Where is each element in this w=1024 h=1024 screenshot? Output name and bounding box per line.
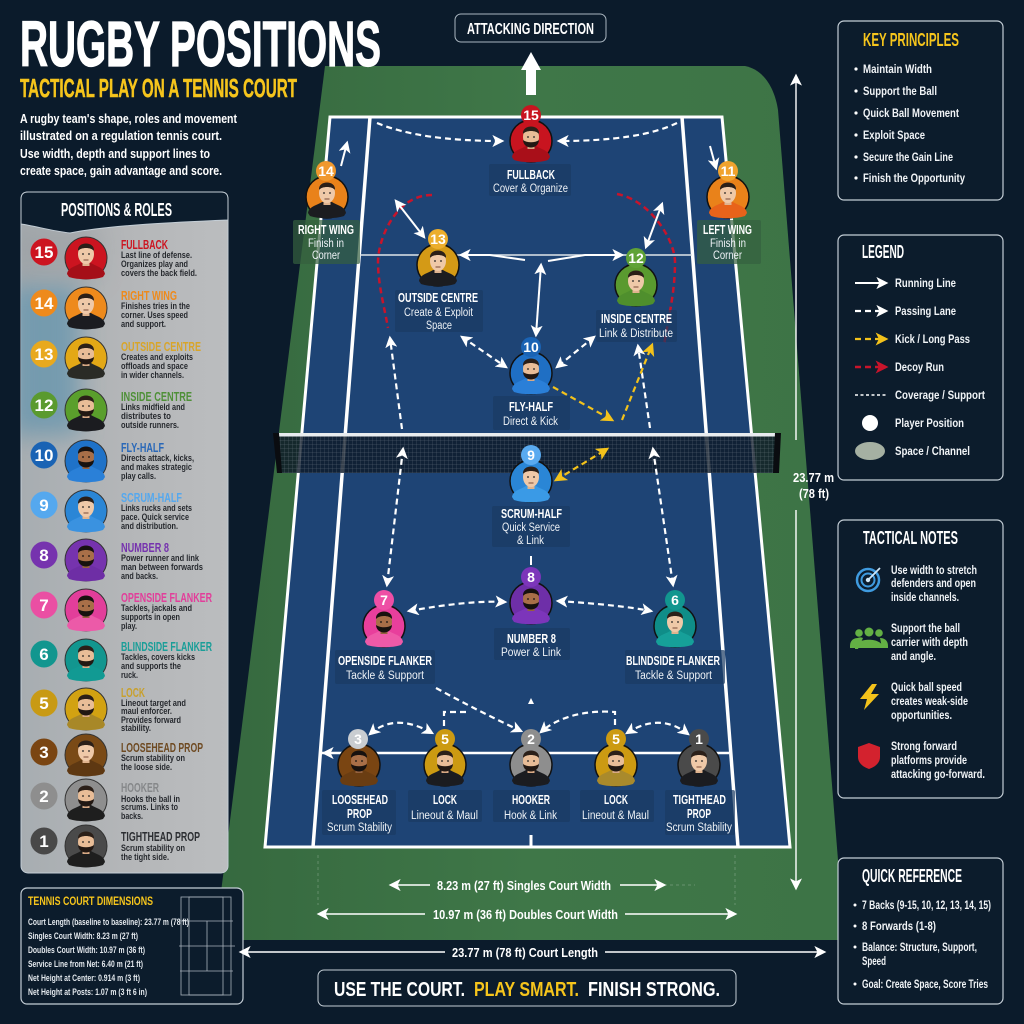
player: loosehead prop	[322, 729, 396, 835]
panel: tennis court dimensions: Court Length (baseline to baseline): 23.77 m (78 ft)	[28, 917, 189, 928]
panel: tactical notes: Strong forward	[891, 741, 957, 753]
player: inside centre: Link & Distribute	[599, 328, 673, 340]
player: left wing: Finish in	[710, 238, 746, 250]
dimension: doubles court width: 10.97 m (36 ft) Doubles Court Width	[433, 907, 618, 922]
row: loosehead prop: 3	[39, 743, 49, 762]
player: blindside flanker: BLINDSIDE FLANKER	[626, 654, 720, 668]
row: outside centre: Creates and exploits	[121, 352, 193, 363]
row: openside flanker	[30, 589, 212, 632]
panel: key principles	[838, 21, 1003, 200]
player: hooker: 2	[527, 731, 535, 747]
row: hooker: scrums. Links to	[121, 802, 178, 813]
panel: key principles: Maintain Width	[863, 64, 932, 76]
bottom banner	[318, 970, 736, 1006]
row: inside centre: distributes to	[121, 411, 171, 422]
row: fly-half: 10	[35, 446, 53, 465]
player: blindside flanker	[625, 590, 725, 684]
intro text: A rugby team's shape, roles and movement	[20, 111, 238, 126]
row: scrum-half: pace. Quick service	[121, 512, 189, 523]
panel: key principles: Exploit Space	[863, 130, 925, 142]
row: outside centre: OUTSIDE CENTRE	[121, 340, 201, 354]
panel: tactical notes: Quick ball speed	[891, 682, 962, 694]
player: lock left: 5	[441, 731, 449, 747]
legend: player position: Player Position	[895, 418, 964, 430]
legend: player position	[862, 415, 964, 431]
panel: key principles: Support the Ball	[863, 86, 937, 98]
player: hooker: HOOKER	[512, 793, 550, 807]
player: tighthead prop: PROP	[687, 807, 711, 821]
subtitle: TACTICAL PLAY ON A TENNIS COURT	[20, 73, 297, 103]
player: scrum-half: 9	[527, 447, 535, 463]
player: outside centre: Space	[426, 320, 452, 332]
intro text	[20, 111, 238, 178]
attacking direction label: ATTACKING DIRECTION	[467, 21, 594, 38]
legend: decoy run	[855, 362, 944, 374]
player: tighthead prop: Scrum Stability	[666, 822, 732, 834]
row: outside centre	[30, 337, 201, 381]
intro text: create space, gain advantage and score.	[20, 163, 222, 178]
row: loosehead prop	[30, 734, 203, 776]
arrow: attacking direction	[521, 52, 541, 95]
icon: lightning bolt	[860, 684, 879, 710]
player: tighthead prop: TIGHTHEAD	[673, 793, 726, 807]
bottom banner: USE THE COURT.	[334, 979, 465, 1001]
row: right wing	[30, 287, 190, 330]
row: blindside flanker: Tackles, covers kicks	[121, 652, 195, 663]
row: scrum-half: 9	[39, 496, 49, 515]
row: outside centre: in wider channels.	[121, 370, 184, 381]
player: inside centre: 12	[628, 250, 644, 266]
panel: quick reference: 8 Forwards (1-8)	[862, 921, 936, 933]
row: hooker	[30, 779, 180, 822]
player: loosehead prop: PROP	[347, 807, 372, 821]
row: number 8: NUMBER 8	[121, 541, 169, 555]
row: right wing: and support.	[121, 319, 166, 330]
legend: kick: Kick / Long Pass	[895, 334, 970, 346]
player: openside flanker	[335, 590, 435, 684]
player: openside flanker: 7	[380, 592, 388, 608]
panel: key principles: Secure the Gain Line	[863, 152, 953, 164]
row: right wing: Finishes tries in the	[121, 301, 190, 312]
player: outside centre	[395, 229, 483, 332]
net	[273, 433, 781, 473]
row: outside centre: 13	[35, 345, 53, 364]
player: scrum-half: Quick Service	[502, 522, 560, 534]
player: loosehead prop: 3	[354, 731, 362, 747]
legend: running line: Running Line	[895, 278, 956, 290]
panel: legend: LEGEND	[862, 242, 904, 262]
panel: tactical notes: Use width to stretch	[891, 565, 977, 577]
player: number 8: Power & Link	[501, 647, 561, 659]
row: hooker: HOOKER	[121, 781, 159, 795]
row: lock: 5	[39, 694, 49, 713]
row: fly-half	[30, 440, 194, 482]
player: fullback	[489, 105, 571, 196]
player: inside centre	[596, 248, 677, 342]
player: scrum-half: & Link	[517, 535, 544, 547]
player: fly-half: FLY-HALF	[509, 400, 553, 414]
legend: decoy run: Decoy Run	[895, 362, 944, 374]
panel: tactical notes: carrier with depth	[891, 637, 968, 649]
row: fly-half: Directs attack, kicks,	[121, 453, 194, 464]
player: fly-half: Direct & Kick	[503, 416, 558, 428]
player: lock right: LOCK	[604, 793, 628, 807]
movement lines	[324, 123, 716, 753]
player: right wing: RIGHT WING	[298, 223, 354, 237]
panel: tactical notes: platforms provide	[891, 755, 967, 767]
panel: tactical notes: opportunities.	[891, 710, 952, 722]
green court surround	[215, 66, 838, 940]
dimension: court length vertical	[793, 76, 834, 888]
row: openside flanker: OPENSIDE FLANKER	[121, 591, 212, 605]
legend: coverage	[855, 390, 985, 402]
row: fullback: Last line of defense.	[121, 250, 192, 261]
row: inside centre: INSIDE CENTRE	[121, 390, 192, 404]
panel: tactical notes: attacking go-forward.	[891, 769, 985, 781]
row: number 8: 8	[39, 546, 49, 565]
row: right wing: 14	[35, 294, 54, 313]
panel: positions and roles	[10, 192, 228, 873]
panel: tactical notes: TACTICAL NOTES	[863, 528, 958, 548]
panel: quick reference: Speed	[862, 956, 886, 968]
panel: tennis court dimensions: TENNIS COURT DIMENSIONS	[28, 894, 153, 908]
intro text: Use width, depth and support lines to	[20, 146, 210, 161]
bottom banner: FINISH STRONG.	[588, 979, 720, 1001]
row: fullback: Organizes play and	[121, 259, 188, 270]
panel: tennis court dimensions: Singles Court Width: 8.23 m (27 ft)	[28, 931, 138, 942]
row: fullback	[30, 237, 197, 279]
icon: target	[857, 568, 880, 591]
intro text: illustrated on a regulation tennis court.	[20, 128, 222, 143]
row: scrum-half	[30, 490, 192, 532]
panel: tactical notes: inside channels.	[891, 592, 959, 604]
icon: shield	[858, 743, 880, 769]
player: blindside flanker: 6	[671, 592, 679, 608]
player: hooker: Hook & Link	[504, 810, 557, 822]
row: outside centre: offloads and space	[121, 361, 188, 372]
row: blindside flanker	[30, 639, 212, 681]
player: hooker	[493, 729, 570, 822]
player: lock left: LOCK	[433, 793, 457, 807]
row: lock: maul enforcer.	[121, 706, 172, 717]
mini court diagram	[179, 897, 235, 995]
row: hooker: Hooks the ball in	[121, 794, 180, 805]
row: inside centre: outside runners.	[121, 420, 179, 431]
panel: tennis court dimensions: Service Line from Net: 6.40 m (21 ft)	[28, 959, 143, 970]
player: scrum-half: SCRUM-HALF	[501, 507, 562, 521]
player: left wing	[697, 161, 761, 264]
panel: tennis court dimensions: Net Height at Posts: 1.07 m (3 ft 6 in)	[28, 987, 147, 998]
player: fullback: 15	[523, 107, 539, 123]
panel: tactical notes: creates weak-side	[891, 696, 968, 708]
row: hooker: 2	[39, 787, 49, 806]
player: loosehead prop: Scrum Stability	[327, 822, 392, 834]
row: lock: Lineout target and	[121, 698, 186, 709]
player: left wing: 11	[721, 163, 736, 179]
row: blindside flanker: and supports the	[121, 661, 181, 672]
row: lock	[30, 686, 186, 734]
player: lock left	[408, 729, 482, 822]
panel: tennis court dimensions: Net Height at Center: 0.914 m (3 ft)	[28, 973, 140, 984]
legend: passing lane	[855, 306, 956, 318]
panel heading: POSITIONS & ROLES	[61, 200, 172, 220]
player: inside centre: INSIDE CENTRE	[601, 312, 672, 326]
row: inside centre: Links midfield and	[121, 402, 185, 413]
row: lock: stability.	[121, 723, 151, 734]
panel: key principles: KEY PRINCIPLES	[863, 30, 959, 50]
row: fullback: FULLBACK	[121, 238, 168, 252]
row: blindside flanker: ruck.	[121, 670, 138, 681]
player: number 8	[494, 567, 570, 660]
player: outside centre: OUTSIDE CENTRE	[398, 291, 478, 305]
panel: tennis court dimensions: Doubles Court Width: 10.97 m (36 ft)	[28, 945, 145, 956]
row: openside flanker: 7	[39, 596, 49, 615]
attacking direction label	[455, 14, 606, 42]
panel: tennis court dimensions	[21, 888, 243, 1004]
player: left wing: LEFT WING	[703, 223, 752, 237]
panel: quick reference: Balance: Structure, Support,	[862, 942, 977, 954]
row: number 8	[30, 539, 203, 582]
row: openside flanker: play.	[121, 621, 137, 632]
row: blindside flanker: 6	[39, 645, 49, 664]
row: tighthead prop: Scrum stability on	[121, 843, 185, 854]
dimension: court length vertical: (78 ft)	[799, 486, 829, 501]
row: inside centre	[30, 389, 192, 431]
row: scrum-half: Links rucks and sets	[121, 503, 192, 514]
row: lock: LOCK	[121, 686, 145, 700]
row: loosehead prop: Scrum stability on	[121, 753, 185, 764]
row: number 8: and backs.	[121, 571, 158, 582]
title: RUGBY POSITIONS	[20, 8, 381, 80]
player: scrum-half	[492, 445, 570, 547]
player: fly-half	[493, 337, 570, 430]
panel: tactical notes: and angle.	[891, 651, 936, 663]
row: fly-half: play calls.	[121, 471, 156, 482]
player: right wing: 14	[318, 163, 334, 179]
row: hooker: backs.	[121, 811, 143, 822]
legend: coverage: Coverage / Support	[895, 390, 985, 402]
panel: tactical notes: defenders and open	[891, 578, 976, 590]
icon: support group	[850, 628, 888, 649]
row: tighthead prop: TIGHTHEAD PROP	[121, 830, 200, 844]
row: fly-half: and makes strategic	[121, 462, 192, 473]
row: right wing: corner. Uses speed	[121, 310, 188, 321]
panel: quick reference	[838, 858, 1003, 1004]
bottom banner: PLAY SMART.	[474, 979, 579, 1001]
player: tighthead prop: 1	[695, 731, 703, 747]
row: blindside flanker: BLINDSIDE FLANKER	[121, 640, 212, 654]
row: number 8: Power runner and link	[121, 553, 200, 564]
player: right wing: Finish in	[308, 238, 344, 250]
row: inside centre: 12	[35, 396, 53, 415]
legend: kick	[855, 334, 970, 346]
player: openside flanker: Tackle & Support	[346, 670, 425, 682]
panel: key principles: Finish the Opportunity	[863, 173, 965, 185]
row: fullback: 15	[35, 243, 53, 262]
row: tighthead prop: 1	[39, 832, 49, 851]
panel: tactical notes	[838, 520, 1003, 798]
player: lock left: Lineout & Maul	[411, 810, 478, 822]
dimension: court length horizontal: 23.77 m (78 ft) Court Length	[452, 945, 598, 960]
panel: tactical notes: Support the ball	[891, 623, 960, 635]
row: scrum-half: and distribution.	[121, 521, 178, 532]
player: fly-half: 10	[523, 339, 539, 355]
legend: passing lane: Passing Lane	[895, 306, 956, 318]
player: fullback: FULLBACK	[507, 168, 555, 182]
dimension: court length vertical: 23.77 m	[793, 470, 834, 485]
row: openside flanker: Tackles, jackals and	[121, 603, 192, 614]
player: number 8: NUMBER 8	[507, 632, 556, 646]
row: right wing: RIGHT WING	[121, 289, 177, 303]
dimension: singles court width: 8.23 m (27 ft) Singles Court Width	[437, 878, 611, 893]
row: tighthead prop	[30, 825, 200, 867]
player: right wing	[293, 161, 360, 264]
row: openside flanker: supports in open	[121, 612, 180, 623]
row: fly-half: FLY-HALF	[121, 441, 164, 455]
player: right wing: Corner	[312, 250, 340, 262]
legend: space channel: Space / Channel	[895, 446, 970, 458]
player: loosehead prop: LOOSEHEAD	[332, 793, 388, 807]
legend: running line	[855, 278, 956, 290]
legend: space channel	[855, 442, 970, 460]
row: loosehead prop: the loose side.	[121, 762, 172, 773]
row: fullback: covers the back field.	[121, 268, 197, 279]
player: lock right	[580, 729, 654, 822]
row: scrum-half: SCRUM-HALF	[121, 491, 182, 505]
player: outside centre: 13	[430, 231, 446, 247]
player: number 8: 8	[527, 569, 535, 585]
player: tighthead prop	[665, 729, 735, 835]
row: lock: Provides forward	[121, 715, 181, 726]
player: fullback: Cover & Organize	[493, 183, 568, 195]
panel: key principles: Quick Ball Movement	[863, 108, 959, 120]
player: lock right: Lineout & Maul	[582, 810, 649, 822]
player: blindside flanker: Tackle & Support	[635, 670, 713, 682]
player: left wing: Corner	[713, 250, 742, 262]
panel: legend	[838, 235, 1003, 480]
player: lock right: 5	[612, 731, 620, 747]
row: loosehead prop: LOOSEHEAD PROP	[121, 741, 203, 755]
panel header	[21, 192, 228, 233]
player: openside flanker: OPENSIDE FLANKER	[338, 654, 432, 668]
player: outside centre: Create & Exploit	[404, 307, 474, 319]
row: number 8: man between forwards	[121, 562, 203, 573]
row: tighthead prop: the tight side.	[121, 852, 169, 863]
tennis court	[265, 117, 790, 905]
